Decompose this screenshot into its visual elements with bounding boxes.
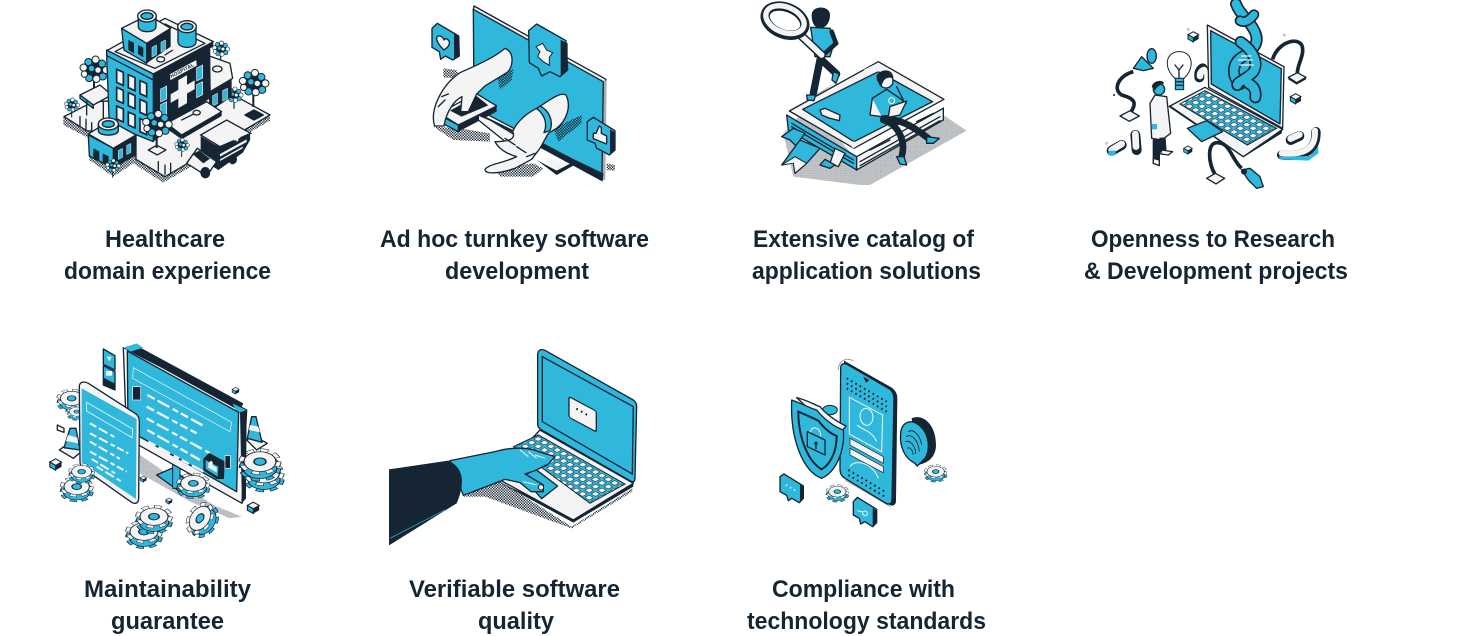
heading: compliance: technology standards <box>747 608 986 635</box>
heading: ad hoc <box>380 226 649 285</box>
person with magnifier <box>761 0 839 101</box>
bubble: thumbs up <box>587 117 615 155</box>
heading: maintainability: guarantee <box>111 608 224 635</box>
heading: research: Openness to Research <box>1091 226 1335 253</box>
cable top right with chip <box>1188 32 1306 104</box>
lower hand <box>485 94 568 173</box>
slot <box>478 115 523 157</box>
heading: compliance: Compliance with <box>772 576 955 603</box>
cones <box>57 417 267 458</box>
rooftop penthouse <box>122 15 171 63</box>
heading: ad hoc: Ad hoc turnkey software <box>380 226 649 253</box>
illustration: people on a large book <box>761 0 967 185</box>
heading: research <box>1084 226 1348 285</box>
fingerprint bubble <box>900 417 936 466</box>
left canopy <box>80 85 112 118</box>
heading: quality <box>409 576 620 635</box>
panel: openness to research and development projects <box>1084 4 1348 285</box>
illustration: monitor, tablet and gears <box>50 343 281 547</box>
panel: ad hoc turnkey software development <box>380 6 649 285</box>
person with laptop <box>870 70 939 165</box>
illustration: phone with shield and fingerprint <box>780 359 945 527</box>
illustration: isometric hospital <box>63 10 270 183</box>
thumbs up card <box>204 454 230 478</box>
heading: healthcare <box>64 226 271 285</box>
trees behind <box>64 41 269 120</box>
illustration: hands reaching out of a monitor <box>432 6 615 182</box>
sleeve <box>389 461 462 545</box>
monitor <box>123 343 247 503</box>
floating buttons <box>103 349 239 394</box>
right wing <box>207 55 233 112</box>
heading: compliance <box>747 576 986 635</box>
heading: healthcare: Healthcare <box>105 226 225 253</box>
cross <box>171 71 195 113</box>
bookmarks <box>782 128 845 173</box>
shadow <box>783 82 967 185</box>
scientist <box>1150 81 1173 166</box>
robot arm with cable left <box>1117 49 1156 121</box>
phone <box>838 359 897 507</box>
DNA helix <box>1234 4 1257 97</box>
bubble: heart <box>432 23 459 60</box>
monitor <box>473 6 607 182</box>
gears upper left <box>50 391 85 470</box>
gears foreground <box>63 451 281 547</box>
laptop base <box>495 430 633 523</box>
shield <box>792 398 846 478</box>
illustration: scientist, laptop and DNA <box>1106 4 1318 188</box>
bubble: star <box>529 24 568 77</box>
entrance canopy <box>167 102 222 149</box>
halftone shadow <box>463 480 632 528</box>
laptop screen <box>538 350 637 482</box>
light bulb <box>1167 52 1191 90</box>
small block building <box>88 118 136 168</box>
panel: verifiable software quality <box>389 350 637 635</box>
roof cylinders <box>138 10 196 62</box>
gears <box>828 466 945 501</box>
illustration: hand typing on laptop <box>389 350 637 545</box>
chat bubble: dots <box>780 474 803 503</box>
front trees <box>106 110 189 178</box>
lower cable and robot arm <box>1207 143 1263 188</box>
heading: healthcare: domain experience <box>64 258 271 285</box>
panel: compliance with technology standards <box>747 359 986 635</box>
heading: catalog: Extensive catalog of <box>753 226 975 253</box>
main building <box>107 18 213 142</box>
hospital sign: HOSPITAL <box>169 62 195 80</box>
panel: extensive catalog of application solutions <box>752 0 981 285</box>
chat bubble: key <box>853 497 877 527</box>
ground platform <box>63 97 270 183</box>
heading: catalog: application solutions <box>752 258 981 285</box>
laptop <box>1168 25 1284 157</box>
heading: ad hoc: development <box>445 258 589 285</box>
heading: maintainability: Maintainability <box>84 576 252 603</box>
panel: healthcare domain experience <box>63 10 271 285</box>
monitor stand <box>157 465 197 492</box>
panel: maintainability guarantee <box>50 343 281 635</box>
arm <box>450 448 555 495</box>
book <box>787 62 944 170</box>
heading: maintainability <box>84 576 252 635</box>
floor shadows <box>140 455 242 518</box>
heading: catalog <box>752 226 981 285</box>
heading: quality: Verifiable software <box>409 576 620 603</box>
heading: research: & Development projects <box>1084 258 1348 285</box>
scattered blobs <box>1106 28 1318 161</box>
halftone shadows <box>433 68 615 177</box>
upper hand <box>433 48 512 126</box>
heading: quality: quality <box>478 608 555 635</box>
ambulance <box>187 120 251 178</box>
tablet <box>79 382 139 503</box>
device <box>439 93 497 132</box>
